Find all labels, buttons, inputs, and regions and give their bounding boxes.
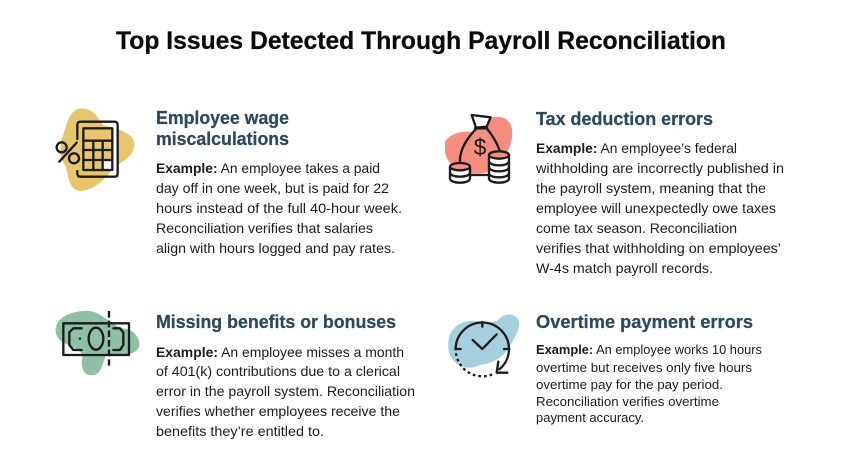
text block: benefits example: error in the payroll system. Reconciliation <box>156 383 415 399</box>
text block: tax example: come tax season. Reconciliation <box>536 220 737 236</box>
heading: overtime payment errors: Overtime payment errors <box>536 311 753 332</box>
icon: money bag and coins <box>445 115 512 183</box>
text block: overtime example: overtime pay for the pay period. <box>536 377 723 392</box>
heading: missing benefits or bonuses: Missing benefits or bonuses <box>156 311 396 332</box>
text block: benefits example: of 401(k) contributions due to a clerical <box>156 363 400 379</box>
text block: overtime example: overtime but receives only five hours <box>536 360 753 375</box>
text block: tax example <box>535 140 784 276</box>
text block: tax example: Example: An employee’s federal <box>536 140 737 156</box>
text block: wage example <box>156 160 402 256</box>
text block: benefits example <box>156 344 415 439</box>
text block: wage example: align with hours logged and pay rates. <box>156 240 395 256</box>
text block: wage example: day off in one week, but is paid for 22 <box>156 180 389 196</box>
icon: clock with overtime arrow <box>448 314 519 376</box>
text block: benefits example: Example: An employee misses a month <box>156 344 404 360</box>
text block: benefits example: benefits they’re entitled to. <box>156 423 324 439</box>
heading: tax deduction errors: Tax deduction errors <box>536 108 713 129</box>
heading: employee wage miscalculations <box>156 107 289 149</box>
panel: missing benefits or bonuses <box>56 311 415 439</box>
title: Top Issues Detected Through Payroll Reconciliation <box>116 27 726 55</box>
text block: overtime example: Example: An employee works 10 hours <box>536 342 762 357</box>
icon: dollar bill with dashed tear line <box>56 311 139 375</box>
heading: employee wage miscalculations: Employee wage <box>156 107 289 128</box>
icon: calculator and percent sign <box>57 108 134 191</box>
text block: tax example: W-4s match payroll records. <box>536 260 713 276</box>
text block: tax example: withholding are incorrectly published in <box>535 160 784 176</box>
panel: tax deduction errors <box>445 108 784 276</box>
heading: employee wage miscalculations: miscalculations <box>156 128 289 149</box>
text block: wage example: Reconciliation verifies that salaries <box>156 220 373 236</box>
text block: overtime example: payment accuracy. <box>536 410 644 425</box>
panel: employee wage miscalculations <box>57 107 402 256</box>
icon: money bag and coins: $ <box>474 134 487 160</box>
text block: overtime example: Reconciliation verifies overtime <box>536 394 719 409</box>
text block: tax example: the payroll system, meaning that the <box>536 180 766 196</box>
text block: wage example: Example: An employee takes a paid <box>156 160 380 176</box>
text block: tax example: verifies that withholding on employees’ <box>536 240 781 256</box>
text block: wage example: hours instead of the full 40-hour week. <box>156 200 402 216</box>
text block: benefits example: verifies whether employees receive the <box>156 403 400 419</box>
text block: tax example: employee will unexpectedly owe taxes <box>536 200 776 216</box>
panel: overtime payment errors <box>448 311 762 425</box>
text block: overtime example <box>536 342 762 425</box>
